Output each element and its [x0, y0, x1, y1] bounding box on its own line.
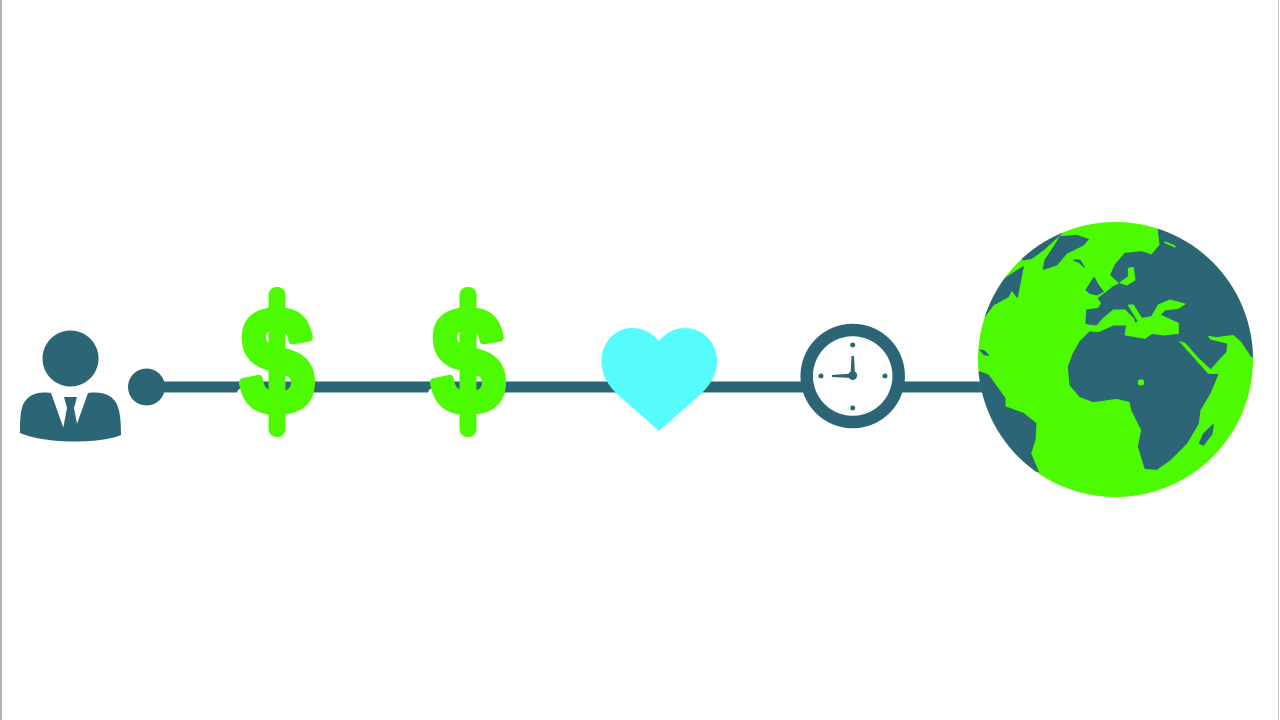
- small Caribbean island: [980, 350, 989, 355]
- icon: heart: [602, 328, 717, 431]
- Red Sea: [1180, 342, 1218, 373]
- Britain: [1086, 277, 1103, 295]
- icon: clock: [807, 330, 899, 422]
- Iceland: [1073, 260, 1084, 267]
- Baltic Sea: [1120, 267, 1135, 285]
- Mediterranean and Black Sea: [1086, 300, 1185, 338]
- connector line with start node: [128, 368, 990, 406]
- icon: globe: [970, 217, 1260, 497]
- icon: dollar sign 1: $: [241, 279, 313, 444]
- South America: [978, 371, 1039, 472]
- icon: businessman: [20, 330, 121, 442]
- Greenland: [1043, 235, 1088, 269]
- Madagascar: [1199, 424, 1213, 445]
- North America: [980, 267, 1023, 318]
- Eurasia and Africa landmass: [1068, 217, 1260, 469]
- Arctic Canada: [1022, 233, 1062, 260]
- Novaya Zemlya: [1165, 242, 1175, 247]
- Lake Victoria: [1138, 380, 1144, 385]
- icon: dollar sign 2: $: [432, 279, 504, 444]
